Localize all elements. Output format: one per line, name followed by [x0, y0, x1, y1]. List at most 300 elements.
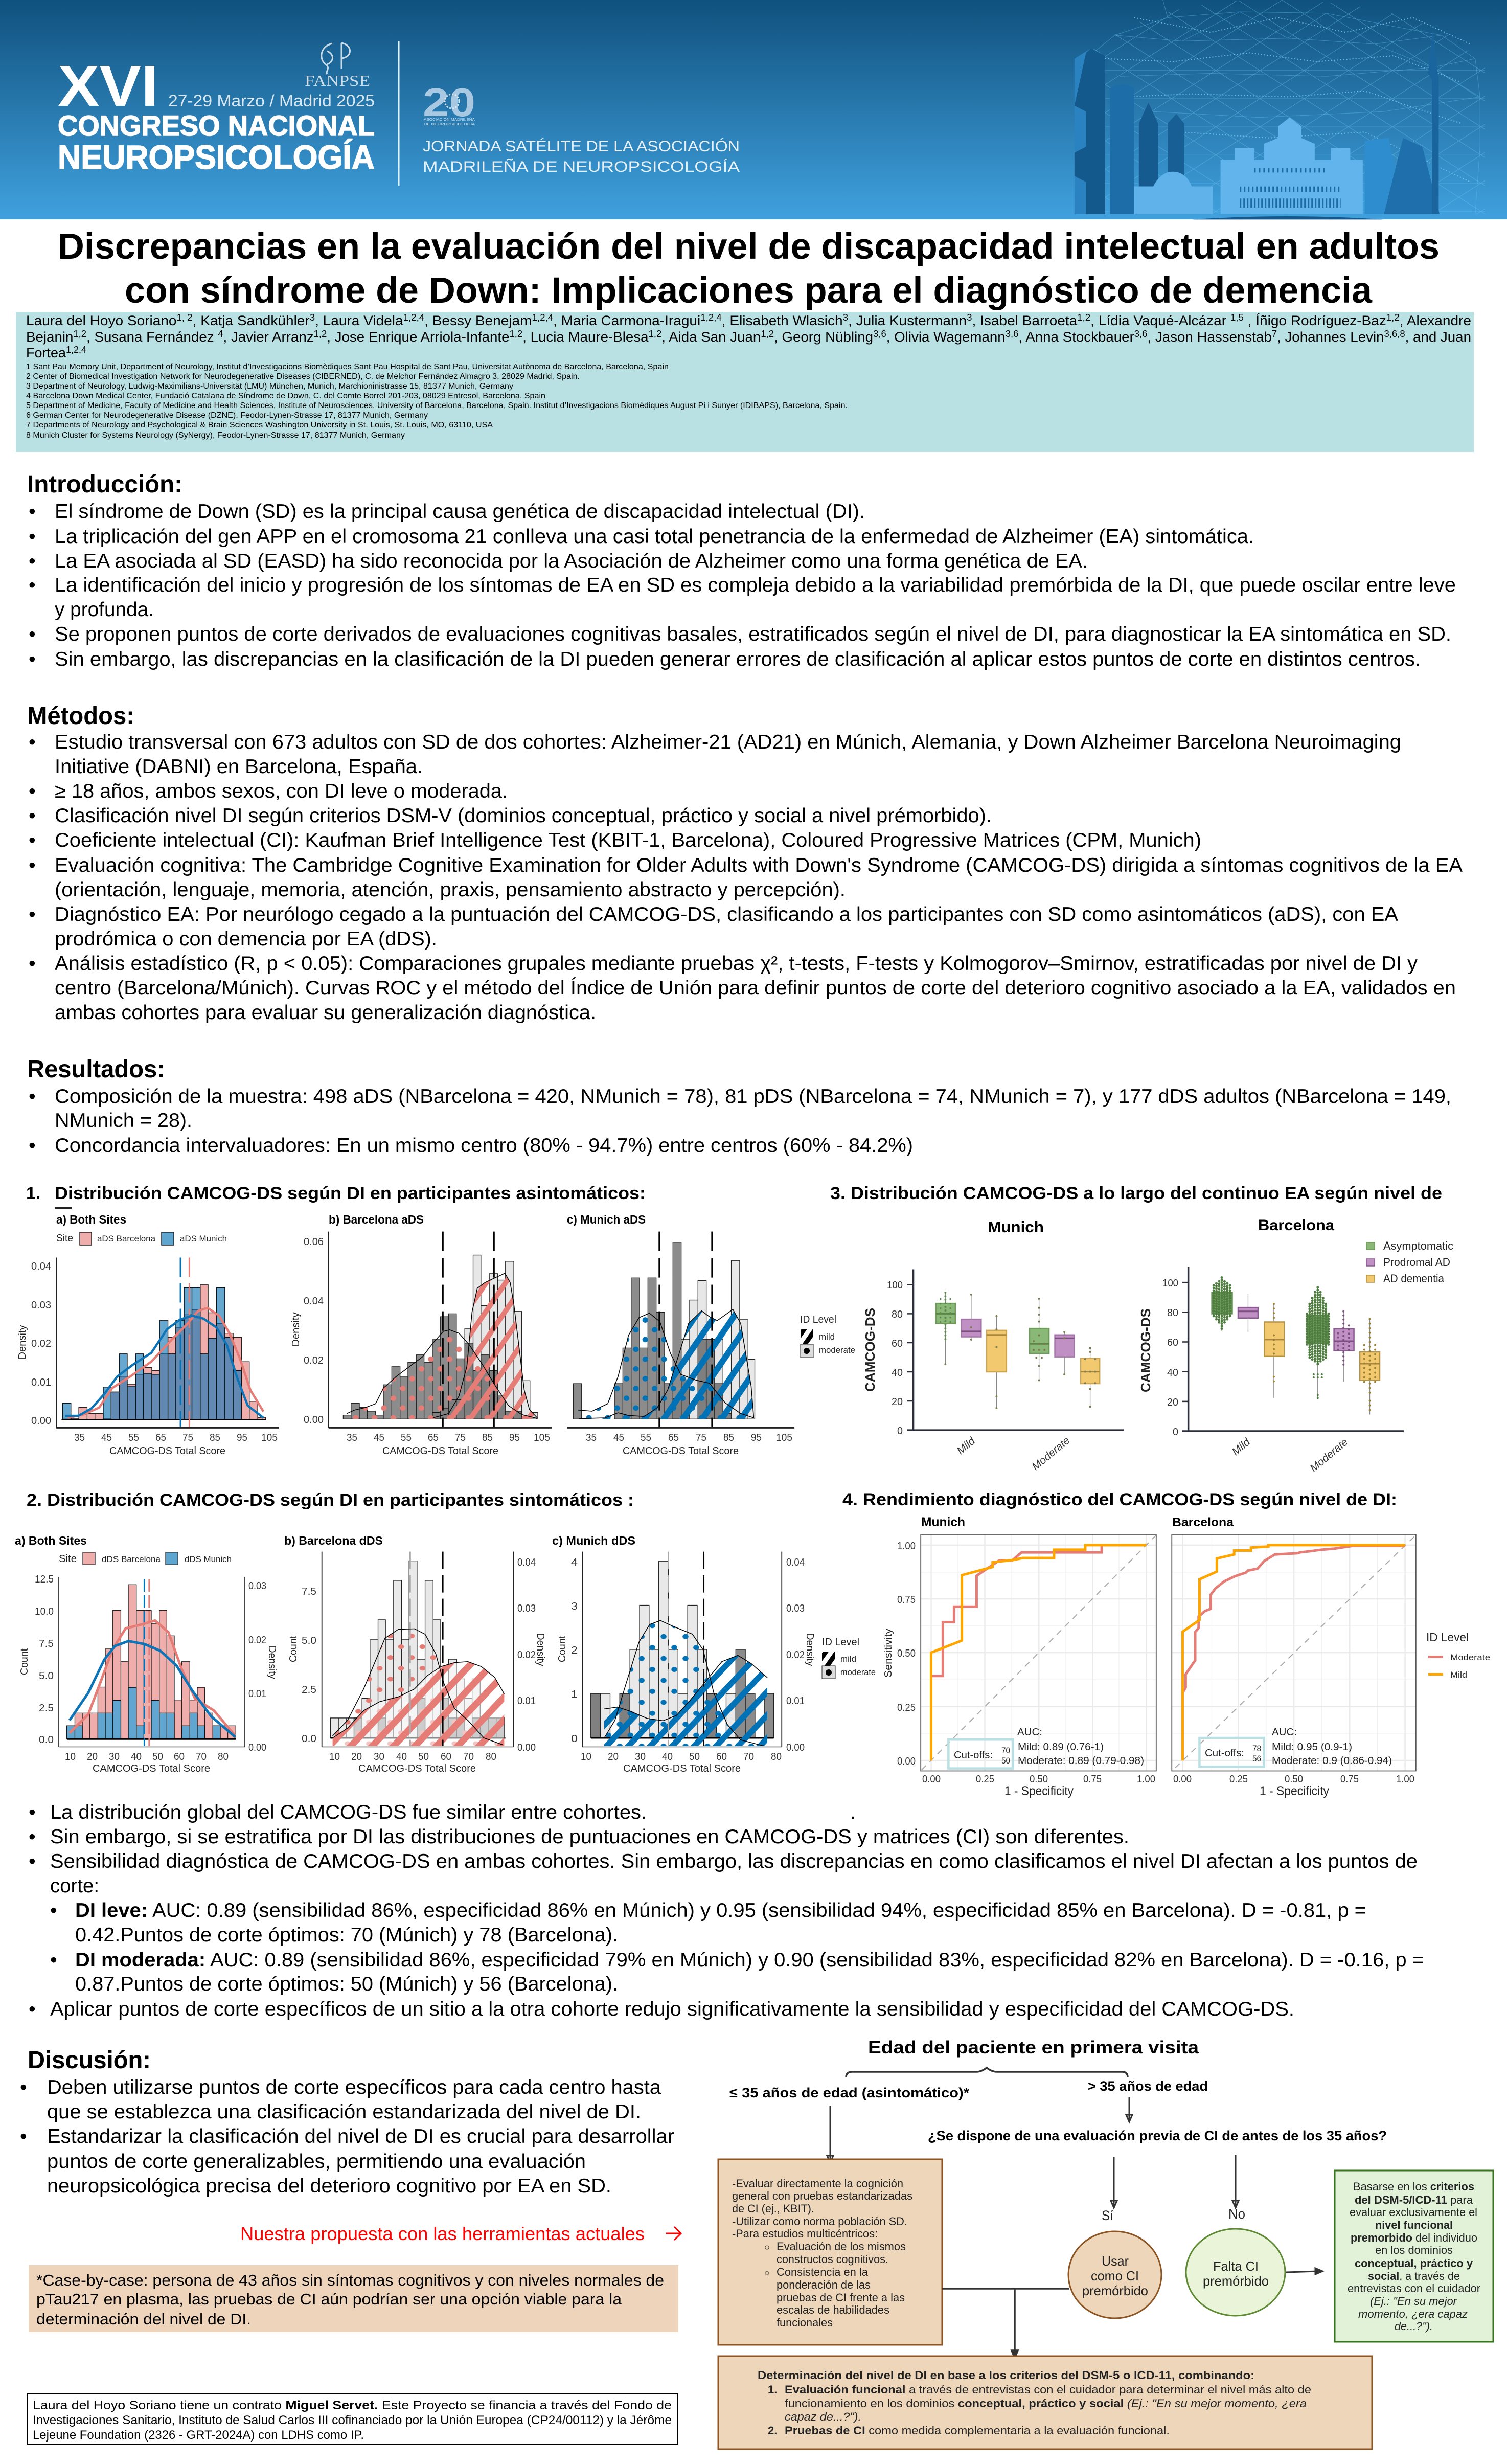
histogram a: both sites: Count	[19, 1648, 30, 1675]
affiliations: 8 Munich Cluster for Systems Neurology (SyNergy), Feodor-Lynen-Strasse 17, 81377 Munich, Germany	[26, 431, 405, 440]
panel titles: c) Munich aDS	[567, 1213, 646, 1226]
histogram a: both sites: 95	[237, 1432, 247, 1443]
histogram b: Barcelona dDS: 40	[396, 1751, 407, 1762]
arrow: to green box	[1286, 2268, 1322, 2274]
heading: Métodos:	[27, 703, 134, 730]
bullet list	[29, 1086, 1451, 1157]
histogram c: Munich dDS: 0.02	[786, 1649, 805, 1661]
bullet list: Composición de la muestra: 498 aDS (NBarcelona = 420, NMunich = 78), 81 pDS (NBarcelona = 74, NMunich = 7), y 177 dDS adultos (NBarcelona = 149,	[55, 1086, 1451, 1107]
section: Introducción	[27, 471, 1456, 670]
histogram b: Barcelona dDS: 20	[351, 1751, 362, 1762]
panel: Munich boxplot: Munich	[988, 1218, 1044, 1236]
histogram a: both sites: 70	[196, 1751, 207, 1762]
node: falta CI premórbido	[1186, 2229, 1285, 2316]
figure 2: distribución sintomáticos	[15, 1490, 876, 1774]
panel: Barcelona boxplot: 80	[1167, 1307, 1178, 1319]
panel: Barcelona boxplot: Moderate	[1308, 1436, 1350, 1474]
histogram c: Munich dDS: 0.01	[786, 1696, 805, 1707]
box: under 35 guidance: de CI (ej., KBIT).	[732, 2202, 814, 2215]
legend: site: aDS Munich	[180, 1234, 227, 1244]
bullet list: •	[29, 805, 36, 827]
histogram b: Barcelona dDS: 0.0	[302, 1733, 316, 1745]
node: usar como CI premórbido	[1068, 2231, 1161, 2318]
panel: Munich ROC: 0.00	[922, 1774, 941, 1785]
panel: Barcelona boxplot	[1138, 1217, 1404, 1474]
authors: 1, 2	[177, 312, 193, 323]
histogram c: Munich dDS: 30	[635, 1751, 646, 1762]
histogram c: Munich dDS: 70	[743, 1751, 754, 1762]
panel: Barcelona ROC: 0.50	[1285, 1774, 1303, 1785]
satellite session text: JORNADA SATÉLITE DE LA ASOCIACIÓN	[423, 138, 740, 155]
authors: 1,2,4	[66, 345, 86, 355]
title	[58, 227, 1440, 311]
histogram c: Munich dDS: 20	[608, 1751, 619, 1762]
AUC Munich	[1017, 1727, 1144, 1767]
authors: , and Juan	[1405, 329, 1471, 345]
AUC Barcelona: Moderate: 0.9 (0.86-0.94)	[1272, 1755, 1392, 1767]
panel: Munich boxplot: 100	[887, 1280, 903, 1291]
arrow: to No	[1232, 2155, 1239, 2208]
bullet list: Coeficiente intelectual (CI): Kaufman Brief Intelligence Test (KBIT-1, Barcelona), Coloured Progressive Matrices (CPM, Munich)	[55, 829, 1201, 851]
histogram a: both sites: 20	[87, 1751, 98, 1762]
panel: Munich ROC: 0.25	[897, 1702, 916, 1713]
cut-offs Barcelona: 78	[1252, 1744, 1261, 1753]
legend: site: Site	[56, 1233, 73, 1244]
authors: 3	[967, 312, 972, 323]
panel: Munich boxplot: 0	[897, 1426, 903, 1437]
panel: Munich ROC: 1.00	[897, 1541, 916, 1552]
figure 3: boxplots CAMCOG-DS continuum	[830, 1184, 1453, 1474]
arrow: to left box	[827, 2106, 833, 2163]
histogram a: both sites: 0.03	[31, 1300, 51, 1311]
panel: Barcelona boxplot: 20	[1167, 1397, 1178, 1408]
histogram c: Munich aDS: 105	[776, 1432, 792, 1443]
results bullet list: .	[850, 1801, 856, 1823]
box: DSM-5 ICD-11 criteria: entrevistas con el cuidador	[1348, 2282, 1480, 2295]
AUC Barcelona: AUC:	[1272, 1727, 1297, 1738]
histogram c: Munich aDS: 85	[723, 1432, 734, 1443]
histogram a: both sites: 80	[218, 1751, 229, 1762]
label: Sí: Sí	[1102, 2208, 1113, 2223]
authors: 3	[843, 312, 848, 323]
affiliations: 1 Sant Pau Memory Unit, Department of Neurology, Institut d’Investigacions Biomèdiques Sant Pau Hospital de Sant Pau, Universitat Autònoma de Barcelona, Barcelona, Spain	[26, 363, 669, 371]
results bullet list: Aplicar puntos de corte específicos de un sitio a la otra cohorte redujo significativamente la sensibilidad y especificidad del CAMCOG-DS.	[50, 1998, 1294, 2020]
authors: 1,5	[1230, 312, 1244, 323]
bullet list	[29, 731, 1463, 1024]
authors: , Johannes Levin	[1277, 329, 1384, 345]
bullet list: •	[29, 780, 36, 802]
callout: proposal with arrow: Nuestra propuesta con las herramientas actuales	[240, 2223, 645, 2244]
AUC Munich: AUC:	[1017, 1727, 1042, 1738]
box: under 35 guidance: Evaluación de los mismos	[777, 2240, 906, 2253]
authors: 1,2	[649, 329, 661, 339]
histogram a: both sites: 2.5	[39, 1703, 54, 1714]
legend: site: dDS Barcelona	[102, 1554, 161, 1564]
AUC Munich: Moderate: 0.89 (0.79-0.98)	[1018, 1755, 1144, 1767]
box: DSM-5 ICD-11 criteria: momento, ¿era capaz	[1358, 2308, 1468, 2320]
panel titles: b) Barcelona dDS	[284, 1534, 383, 1547]
panel: Barcelona ROC: 1 - Specificity	[1260, 1784, 1329, 1798]
panel: Munich boxplot: 20	[892, 1396, 903, 1408]
legend: ID level	[800, 1314, 855, 1358]
results bullet list	[29, 1801, 1424, 2020]
authors: , Jose Enrique Arriola-Infante	[327, 329, 510, 345]
box: ID level determination: 1.	[768, 2383, 777, 2396]
panel titles: c) Munich dDS	[552, 1534, 635, 1547]
results bullet list: •	[29, 1998, 36, 2020]
histogram b: Barcelona aDS: 35	[347, 1432, 357, 1443]
authors: , Lídia Vaqué-Alcázar	[1090, 313, 1230, 328]
results bullet list: corte:	[50, 1875, 99, 1897]
panel: Munich ROC: 0.75	[1083, 1774, 1102, 1785]
authors: , Susana Fernández	[86, 329, 218, 345]
bullet list: •	[29, 1086, 36, 1107]
histogram b: Barcelona aDS: 95	[509, 1432, 520, 1443]
flowchart: edad del paciente	[718, 2038, 1493, 2449]
box: DSM-5 ICD-11 criteria: social, a través de	[1368, 2270, 1460, 2282]
histogram b: Barcelona aDS: 105	[534, 1432, 550, 1443]
bullet list: Estandarizar la clasificación del nivel de DI es crucial para desarrollar	[47, 2126, 674, 2147]
affiliations: 3 Department of Neurology, Ludwig-Maximilians-Universität (LMU) München, Munich, Marchioninistrasse 15, 81377 Munich, Germany	[26, 382, 513, 391]
histogram c: Munich dDS: 3	[571, 1601, 578, 1612]
panel titles: b) Barcelona aDS	[329, 1213, 424, 1226]
histogram a: both sites: 0.01	[248, 1688, 266, 1700]
histogram a: both sites: 0.0	[39, 1734, 54, 1746]
results bullet list: DI moderada: AUC: 0.89 (sensibilidad 86%, especificidad 79% en Múnich) y 0.90 (sensibilidad 83%, especificidad 82% en Barcelona). D = -0.16, p =	[75, 1949, 1424, 1971]
AUC Munich: Mild: 0.89 (0.76-1)	[1018, 1742, 1104, 1753]
legend: ID level: moderate	[840, 1667, 876, 1677]
histogram a: both sites: CAMCOG-DS Total Score	[93, 1763, 210, 1774]
histogram c: Munich dDS: Density	[804, 1633, 815, 1666]
node: usar como CI premórbido: Usar	[1102, 2253, 1129, 2269]
histogram b: Barcelona dDS	[288, 1552, 546, 1774]
callout: case by case: *Case-by-case: persona de 43 años sin síntomas cognitivos y con niveles normales de	[36, 2271, 664, 2289]
authors: 3,6	[873, 329, 886, 339]
authors: 3,6	[1134, 329, 1147, 339]
box: under 35 guidance: general con pruebas estandarizadas	[732, 2189, 912, 2202]
authors: , Isabel Barroeta	[972, 313, 1078, 328]
histogram a: both sites: 55	[128, 1432, 139, 1443]
results bullet list: •	[29, 1850, 36, 1872]
legend: ID level: mild	[819, 1332, 835, 1342]
authors	[26, 312, 1471, 360]
box: under 35 guidance: -Evaluar directamente la cognición	[732, 2177, 903, 2190]
bullet list: •	[29, 953, 36, 975]
histogram a: both sites: 40	[131, 1751, 142, 1762]
histogram b: Barcelona aDS: Density	[290, 1312, 302, 1347]
histogram a: both sites: 50	[152, 1751, 163, 1762]
legend: ID level: ID Level	[800, 1314, 836, 1325]
arrow: to question	[1126, 2097, 1132, 2122]
bullet list: puntos de corte generalizables, permitiendo una evaluación	[47, 2151, 586, 2173]
panel titles: a) Both Sites	[56, 1213, 126, 1226]
bullet list: Análisis estadístico (R, p < 0.05): Comparaciones grupales mediante pruebas χ², t-tests, F-tests y Kolmogorov–Smirnov, estratificadas por nivel de DI y	[55, 953, 1418, 975]
congress name XVI: XVI	[58, 54, 158, 118]
results bullet list: •	[50, 1949, 57, 1971]
bullet list: (orientación, lenguaje, memoria, atención, praxis, pensamiento abstracto y percepción).	[55, 879, 846, 901]
icon: FANPSE logo	[305, 43, 370, 89]
panel: Munich ROC: Sensitivity	[883, 1629, 894, 1678]
legend: site: dDS Munich	[185, 1554, 232, 1564]
results bullet list: DI leve: AUC: 0.89 (sensibilidad 86%, especificidad 86% en Múnich) y 0.95 (sensibilidad 94%, especificidad 85% en Barcelona). D = -0.81, p =	[75, 1900, 1366, 1922]
authors: 1,2	[761, 329, 774, 339]
panel: Munich ROC: 0.50	[897, 1648, 916, 1659]
affiliations: 7 Departments of Neurology and Psychological & Brain Sciences Washington University in St. Louis, St. Louis, MO, 63110, USA	[26, 421, 493, 429]
bullet list	[29, 501, 1456, 670]
histogram b: Barcelona dDS: CAMCOG-DS Total Score	[358, 1763, 476, 1774]
bullet list: •	[20, 2076, 27, 2098]
authors: , Javier Arranz	[223, 329, 314, 345]
connector: boxes to final determination	[942, 2289, 1069, 2358]
bullet list: •	[29, 526, 36, 548]
legend: site	[59, 1552, 232, 1565]
legend: site: Site	[59, 1553, 77, 1565]
authors: , Maria Carmona-Iragui	[553, 313, 700, 328]
legend: AD stage: Prodromal AD	[1383, 1256, 1450, 1269]
box: DSM-5 ICD-11 criteria: en los dominios	[1375, 2244, 1453, 2256]
congress title line 2: NEUROPSICOLOGÍA	[58, 138, 375, 176]
authors: , Elisabeth Wlasich	[722, 313, 843, 328]
divider line	[398, 41, 400, 186]
histogram c: Munich dDS: 80	[771, 1751, 782, 1762]
bullet list: •	[29, 903, 36, 925]
affiliations: 2 Center of Biomedical Investigation Network for Neurodegenerative Diseases (CIBERNED), C. de Melchor Fernández Almagro 3, 28029 Madrid, Spain.	[26, 372, 580, 381]
authors: 1,2	[1386, 312, 1400, 323]
histogram b: Barcelona dDS: 0.02	[517, 1649, 536, 1661]
authors: Fortea	[26, 345, 66, 360]
histogram a: both sites: 10.0	[35, 1606, 54, 1617]
figure heading: 4. Rendimiento diagnóstico del CAMCOG-DS según nivel de DI:	[842, 1490, 1397, 1509]
panel: Munich ROC: 1 - Specificity	[1004, 1784, 1074, 1798]
panel: Barcelona ROC	[1172, 1516, 1416, 1798]
cut-offs Munich: 70	[1001, 1746, 1010, 1755]
panel: authors and affiliations	[16, 312, 1474, 452]
satellite session text	[423, 138, 740, 175]
authors: , Julia Kustermann	[848, 313, 967, 328]
bullet list	[20, 2076, 674, 2197]
box: under 35 guidance: ○	[764, 2268, 770, 2278]
title: Discrepancias en la evaluación del nivel de discapacidad intelectual en adultos	[58, 227, 1440, 267]
box: ID level determination	[718, 2356, 1372, 2449]
box: ID level determination: Evaluación funcional a través de entrevistas con el cuidador para determinar el nivel más alto de	[785, 2383, 1311, 2396]
histogram c: Munich dDS: 50	[689, 1751, 700, 1762]
box: DSM-5 ICD-11 criteria: nivel funcional	[1375, 2219, 1453, 2231]
histogram a: both sites: 7.5	[39, 1638, 54, 1649]
box: ID level determination: funcionamiento en los dominios conceptual, práctico y social (Ej.: "En su mejor momento, ¿era	[785, 2397, 1307, 2410]
histogram b: Barcelona aDS: 0.02	[304, 1355, 324, 1366]
authors: , Jason Hassenstab	[1147, 329, 1272, 345]
legend: ID level lines: Moderate	[1450, 1653, 1490, 1662]
figure heading: Distribución CAMCOG-DS según DI en participantes asintomáticos:	[55, 1184, 646, 1203]
authors: , Lucia Maure-Blesa	[522, 329, 649, 345]
authors: 1,2,4	[532, 312, 553, 323]
bullet list: •	[29, 623, 36, 645]
bullet list: prodrómica o con demencia por EA (dDS).	[55, 928, 437, 950]
legend: ID level	[822, 1637, 876, 1679]
panel: Barcelona ROC: 0.75	[1340, 1774, 1359, 1785]
panel: Munich boxplot: 40	[892, 1367, 903, 1378]
congress title line 1: CONGRESO NACIONAL	[58, 109, 375, 142]
box: DSM-5 ICD-11 criteria: (Ej.: "En su mejor	[1370, 2295, 1458, 2308]
histogram c: Munich dDS: CAMCOG-DS Total Score	[623, 1763, 741, 1774]
authors: 1,2	[510, 329, 522, 339]
label: No: No	[1228, 2206, 1245, 2222]
results bullet list: 0.87.Puntos de corte óptimos: 50 (Múnich) y 56 (Barcelona).	[75, 1973, 618, 1995]
histogram a: both sites: 0.02	[248, 1635, 266, 1646]
bullet list: La triplicación del gen APP en el cromosoma 21 conlleva una casi total penetrancia de la enfermedad de Alzheimer (EA) sintomática.	[55, 526, 1254, 548]
histogram b: Barcelona dDS: 30	[374, 1751, 384, 1762]
figure 1: distribución asintomáticos	[17, 1184, 855, 1457]
bullet list: •	[29, 648, 36, 670]
histogram b: Barcelona dDS: 2.5	[302, 1684, 316, 1696]
authors: , Íñigo Rodríguez-Baz	[1244, 313, 1386, 328]
results bullet list: 0.42.Puntos de corte óptimos: 70 (Múnich) y 78 (Barcelona).	[75, 1924, 618, 1946]
panel titles: a) Both Sites	[15, 1534, 87, 1547]
bullet list: Se proponen puntos de corte derivados de evaluaciones cognitivas basales, estratificados según el nivel de DI, para diagnosticar la EA sintomática en SD.	[55, 623, 1451, 645]
bullet list: ambas cohortes para evaluar su generalización diagnóstica.	[55, 1002, 596, 1024]
bullet list: neuropsicológica precisa del deterioro cognitivo por EA en SD.	[47, 2175, 611, 2197]
box: ID level determination: Determinación del nivel de DI en base a los criterios del DSM-5 o ICD-11, combinando:	[758, 2369, 1254, 2382]
authors: , Aida San Juan	[661, 329, 761, 345]
panel: Munich boxplot: Moderate	[1030, 1435, 1072, 1473]
panel titles	[56, 1213, 646, 1226]
histogram c: Munich aDS: CAMCOG-DS Total Score	[623, 1445, 739, 1457]
congress dates: 27-29 Marzo / Madrid 2025	[168, 92, 375, 110]
histogram a: both sites: 0.03	[248, 1580, 266, 1592]
legend: site	[56, 1232, 227, 1245]
histogram b: Barcelona dDS: 60	[441, 1751, 451, 1762]
histogram a: both sites: 0.02	[31, 1338, 51, 1349]
histogram a: both sites: Density	[17, 1325, 28, 1359]
histogram b: Barcelona aDS: 85	[482, 1432, 493, 1443]
section: Discusión	[20, 2047, 681, 2444]
heading: Resultados:	[27, 1056, 165, 1083]
legend: AD stage	[1366, 1239, 1453, 1285]
affiliations: 5 Department of Medicine, Faculty of Medicine and Health Sciences, Institute of Neurosciences, University of Barcelona, Barcelona, Spain. Institut d’Investigacions Biomèdiques August Pi i Sunyer (IDIBAPS), Barcelona, Spain.	[26, 401, 848, 410]
histogram c: Munich dDS: 0.03	[786, 1603, 805, 1614]
panel: Munich boxplot: 60	[892, 1338, 903, 1349]
histogram b: Barcelona dDS: Density	[535, 1633, 546, 1666]
bullet list: Sin embargo, las discrepancias en la clasificación de la DI pueden generar errores de clasificación al aplicar estos puntos de corte en distintos centros.	[55, 648, 1421, 670]
bullet list: Diagnóstico EA: Por neurólogo cegado a la puntuación del CAMCOG-DS, clasificando a los participantes con SD como asintomáticos (aDS), con EA	[55, 903, 1398, 925]
histogram a: both sites: 60	[174, 1751, 185, 1762]
legend: ID level lines: ID Level	[1426, 1631, 1469, 1644]
box: under 35 guidance: -Para estudios multicéntricos:	[732, 2227, 878, 2240]
histogram b: Barcelona dDS: 7.5	[302, 1586, 316, 1597]
affiliations: 4 Barcelona Down Medical Center, Fundació Catalana de Síndrome de Down, C. del Comte Borrel 201-203, 08029 Entresol, Barcelona, Spain	[26, 392, 545, 400]
funding box: Lejeune Foundation (2326 - GRT-2024A) con LDHS como IP.	[33, 2428, 364, 2442]
AUC Barcelona: Mild: 0.95 (0.9-1)	[1272, 1742, 1352, 1753]
histogram b: Barcelona dDS: 80	[486, 1751, 496, 1762]
authors: 7	[1272, 329, 1277, 339]
arrow: to Sí	[1111, 2157, 1117, 2208]
bullet list: centro (Barcelona/Múnich). Curvas ROC y el método del Índice de Unión para definir puntos de corte del deterioro cognitivo asociado a la EA, validados en	[55, 977, 1456, 999]
histogram c: Munich dDS: 4	[571, 1557, 578, 1568]
box: under 35 guidance: ponderación de las	[777, 2278, 871, 2291]
panel: Munich boxplot: 80	[892, 1309, 903, 1320]
histogram c: Munich dDS: 1	[571, 1689, 578, 1700]
histogram c: Munich aDS: 35	[586, 1432, 597, 1443]
AUC Barcelona	[1272, 1727, 1392, 1767]
bullet list: La EA asociada al SD (EASD) ha sido reconocida por la Asociación de Alzheimer como una forma genética de EA.	[55, 550, 1088, 572]
branch label: over 35: > 35 años de edad	[1088, 2078, 1208, 2094]
panel titles	[15, 1534, 635, 1547]
box: under 35 guidance: funcionales	[777, 2316, 833, 2329]
cut-offs Munich: Cut-offs:	[954, 1750, 993, 1761]
histogram b: Barcelona aDS: CAMCOG-DS Total Score	[382, 1445, 498, 1457]
legend: ID level: moderate	[819, 1345, 855, 1355]
bullet list: NMunich = 28).	[55, 1110, 192, 1132]
title: con síndrome de Down: Implicaciones para el diagnóstico de demencia	[125, 270, 1373, 311]
bullet list: •	[29, 1135, 36, 1157]
panel: Barcelona boxplot: CAMCOG-DS	[1138, 1308, 1153, 1392]
legend: site: aDS Barcelona	[97, 1234, 156, 1244]
box: under 35 guidance: Consistencia en la	[777, 2266, 869, 2278]
results bullet list: Sin embargo, si se estratifica por DI las distribuciones de puntuaciones en CAMCOG-DS y matrices (CI) son diferentes.	[50, 1826, 1129, 1848]
flowchart title: Edad del paciente en primera visita	[868, 2038, 1199, 2058]
histogram a: both sites	[19, 1574, 278, 1774]
node: falta CI premórbido: premórbido	[1203, 2273, 1269, 2289]
box: DSM-5 ICD-11 criteria: de...?").	[1395, 2320, 1433, 2333]
histogram b: Barcelona dDS: 0.00	[517, 1742, 536, 1753]
icon: Madrid skyline with network dome	[1075, 0, 1485, 219]
bullet list: ≥ 18 años, ambos sexos, con DI leve o moderada.	[55, 780, 508, 802]
authors: 4	[218, 329, 223, 339]
panel: Munich ROC: 0.25	[976, 1774, 994, 1785]
icon: FANPSE logo: FANPSE	[305, 72, 370, 89]
authors: , Olivia Wagemann	[886, 329, 1006, 345]
authors: Laura del Hoyo Soriano	[26, 313, 171, 328]
histogram c: Munich dDS: 2	[571, 1645, 578, 1656]
authors: 3,6,8	[1384, 329, 1405, 339]
panel: Munich ROC: Munich	[921, 1515, 965, 1529]
histogram a: both sites: Density	[266, 1645, 278, 1679]
box: under 35 guidance: constructos cognitivos.	[777, 2253, 888, 2266]
histogram b: Barcelona aDS: 75	[455, 1432, 466, 1443]
histogram b: Barcelona aDS: 65	[428, 1432, 439, 1443]
bullet list: Evaluación cognitiva: The Cambridge Cognitive Examination for Older Adults with Down's Syndrome (CAMCOG-DS) dirigida a síntomas cognitivos de la EA	[55, 854, 1463, 876]
question: ¿Se dispone de una evaluación previa de CI de antes de los 35 años?	[928, 2128, 1387, 2143]
authors: , Alexandre	[1400, 313, 1471, 328]
bullet list: y profunda.	[55, 599, 154, 621]
histogram b: Barcelona dDS: 0.04	[517, 1557, 536, 1568]
box: DSM-5 ICD-11 criteria	[1335, 2171, 1493, 2342]
bullet list: La identificación del inicio y progresión de los síntomas de EA en SD es compleja debido a la variabilidad premórbida de la DI, que puede oscilar entre leve	[55, 574, 1456, 596]
panel: Munich ROC: 0.00	[897, 1756, 916, 1767]
authors: 3,6	[1006, 329, 1018, 339]
panel: Barcelona ROC: Barcelona	[1172, 1516, 1234, 1529]
cut-offs Barcelona: Cut-offs:	[1205, 1748, 1244, 1759]
bullet list: que se establezca una clasificación estandarizada del nivel de DI.	[47, 2101, 641, 2123]
authors: , Katja Sandkühler	[193, 313, 310, 328]
histogram b: Barcelona aDS: 0.00	[304, 1414, 324, 1426]
panel: Barcelona boxplot: 60	[1167, 1337, 1178, 1348]
node: usar como CI premórbido: como CI	[1091, 2268, 1139, 2284]
branch label: up to 35: ≤ 35 años de edad (asintomático)*	[729, 2085, 970, 2100]
bullet list: •	[29, 501, 36, 523]
panel: Barcelona boxplot: 40	[1167, 1367, 1178, 1378]
histogram c: Munich dDS	[557, 1552, 815, 1774]
heading: Discusión:	[28, 2047, 151, 2074]
histogram a: both sites: 10	[65, 1751, 76, 1762]
histogram a: both sites: CAMCOG-DS Total Score	[109, 1445, 225, 1457]
histogram c: Munich dDS: Count	[557, 1636, 568, 1662]
histogram c: Munich aDS: 45	[613, 1432, 624, 1443]
callout: case by case: pTau217 en plasma, las pruebas de CI aún podrían ser una opción viable para la	[36, 2290, 622, 2308]
panel: Munich boxplot: CAMCOG-DS	[862, 1308, 878, 1392]
bullet list: Clasificación nivel DI según criterios DSM-V (dominios conceptual, práctico y social a nivel prémorbido).	[55, 805, 992, 827]
panel: Barcelona boxplot: Barcelona	[1258, 1217, 1334, 1234]
